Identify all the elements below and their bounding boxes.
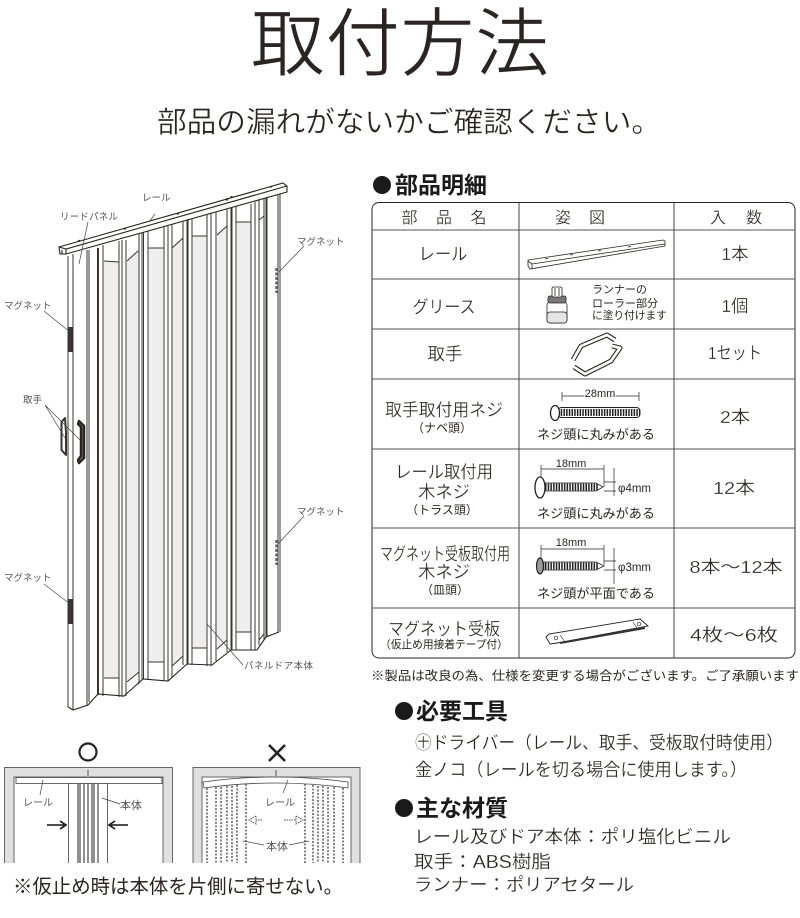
materials list: ランナー：ポリアセタール (414, 875, 634, 895)
note: grease: ランナーの (592, 283, 647, 296)
quantity: magnet plate: 4枚～6枚 (690, 625, 778, 645)
heading: parts list: 部品明細 (395, 172, 487, 198)
vertical door lines (68, 190, 280, 710)
title: 取付方法 (250, 2, 550, 86)
note: grease (592, 283, 667, 322)
leader lines (44, 214, 304, 665)
wall frame (193, 768, 360, 863)
subtitle: 部品の漏れがないかご確認ください。 (157, 106, 661, 139)
quantity: handle screw: 2本 (720, 407, 750, 427)
icon: truss head screw: ネジ頭に丸みがある (537, 506, 655, 521)
label レール: レール (265, 798, 295, 809)
row: magnet plate screw (380, 544, 510, 597)
label: マグネット upper left: マグネット (4, 300, 52, 312)
label レール: レール (23, 798, 53, 809)
bowed rail (203, 777, 348, 788)
icon: rail (528, 240, 665, 269)
dashed arrows (249, 816, 303, 824)
table grid (372, 202, 795, 658)
table footnote: ※製品は改良の為、仕様を変更する場合がございます。ご了承願います (371, 668, 799, 683)
wrong diagram (193, 745, 360, 863)
door illustration (44, 183, 304, 710)
label: マグネット upper right: マグネット (297, 236, 345, 248)
label 本体: 本体 (120, 798, 142, 812)
rail (59, 183, 287, 254)
row: magnet plate screw: マグネット受板取付用 (380, 544, 510, 564)
icon: grease (547, 287, 567, 323)
tools list: 金ノコ（レールを切る場合に使用します。） (415, 760, 747, 780)
icon: magnet plate (546, 619, 648, 644)
row: magnet plate (380, 619, 508, 651)
parts table (372, 202, 795, 658)
label: レール: レール (142, 193, 171, 204)
quantity: rail screw: 12本 (713, 478, 755, 498)
gray panel fills (104, 222, 251, 682)
correct diagram (4, 744, 172, 863)
icon: truss head screw: φ4mm (618, 483, 651, 495)
leaders (243, 780, 309, 845)
icon: pan head screw: 28mm (585, 388, 615, 400)
arrows (47, 821, 128, 829)
tools list (415, 733, 783, 780)
handles (62, 418, 84, 463)
row: magnet plate: （仮止め用接着テープ付） (380, 637, 508, 651)
quantity: magnet plate screw: 8本～12本 (690, 557, 782, 577)
icon: truss head screw (535, 458, 655, 521)
door body (68, 784, 108, 863)
row: rail screw: 木ネジ (418, 482, 470, 502)
icon: flat head screw: ネジ頭が平面である (537, 586, 655, 601)
rail (16, 778, 162, 784)
dotted door panels (207, 784, 343, 863)
label: パネルドア本体: パネルドア本体 (244, 660, 313, 672)
row: handle screw: 取手取付用ネジ (385, 400, 503, 420)
down marker (87, 770, 89, 778)
icon: flat head screw (536, 537, 655, 601)
label: マグネット lower left: マグネット (4, 572, 52, 584)
note: grease: に塗り付けます (592, 309, 667, 322)
note: grease: ローラー部分 (592, 297, 658, 310)
icon: handles (573, 335, 620, 374)
row: rail: レール (418, 244, 468, 264)
row: rail screw (395, 462, 493, 517)
icon: flat head screw: 18mm (556, 537, 586, 549)
heading: main materials: 主な材質 (416, 795, 508, 821)
icon: cross mark (269, 745, 285, 761)
icon: truss head screw: 18mm (556, 458, 586, 470)
row: handle: 取手 (428, 344, 462, 364)
leaders (40, 780, 120, 804)
down marker (275, 770, 277, 778)
row: rail screw: レール取付用 (395, 462, 493, 482)
caution note: ※仮止め時は本体を片側に寄せない。 (13, 876, 343, 898)
icon: pan head screw: ネジ頭に丸みがある (537, 427, 655, 442)
materials list: 取手：ABS樹脂 (414, 852, 551, 872)
label 本体: 本体 (266, 839, 288, 853)
label: 取手: 取手 (23, 394, 43, 406)
row: handle screw: （ナベ頭） (412, 421, 472, 435)
bottom edge (68, 632, 279, 710)
quantity: grease: 1個 (722, 296, 748, 316)
icon: flat head screw: φ3mm (618, 562, 651, 574)
quantity: handle: 1セット (708, 343, 762, 363)
row: magnet plate screw: （皿頭） (421, 583, 469, 597)
header: 部品名: 部品名 (402, 209, 486, 227)
label: リードパネル: リードパネル (60, 212, 118, 223)
header: 姿図: 姿図 (555, 209, 605, 227)
wall frame (4, 768, 172, 863)
materials list (414, 827, 731, 895)
row: handle screw (385, 400, 503, 435)
icon: circle mark (80, 744, 96, 760)
row: magnet plate screw: 木ネジ (418, 562, 470, 582)
heading: required tools: 必要工具 (416, 698, 508, 724)
header: 入数: 入数 (710, 209, 762, 227)
magnets (68, 268, 276, 624)
row: grease: グリース (412, 297, 476, 317)
materials list: レール及びドア本体：ポリ塩化ビニル (414, 827, 731, 847)
icon: pan head screw (537, 388, 655, 442)
label: マグネット lower right: マグネット (297, 506, 345, 518)
tools list: ㊉ドライバー（レール、取手、受板取付時使用） (415, 733, 783, 753)
row: magnet plate: マグネット受板 (388, 619, 500, 639)
panel tops and bottoms (104, 216, 264, 682)
quantity: rail: 1本 (722, 244, 748, 264)
row: rail screw: （トラス頭） (406, 503, 478, 517)
